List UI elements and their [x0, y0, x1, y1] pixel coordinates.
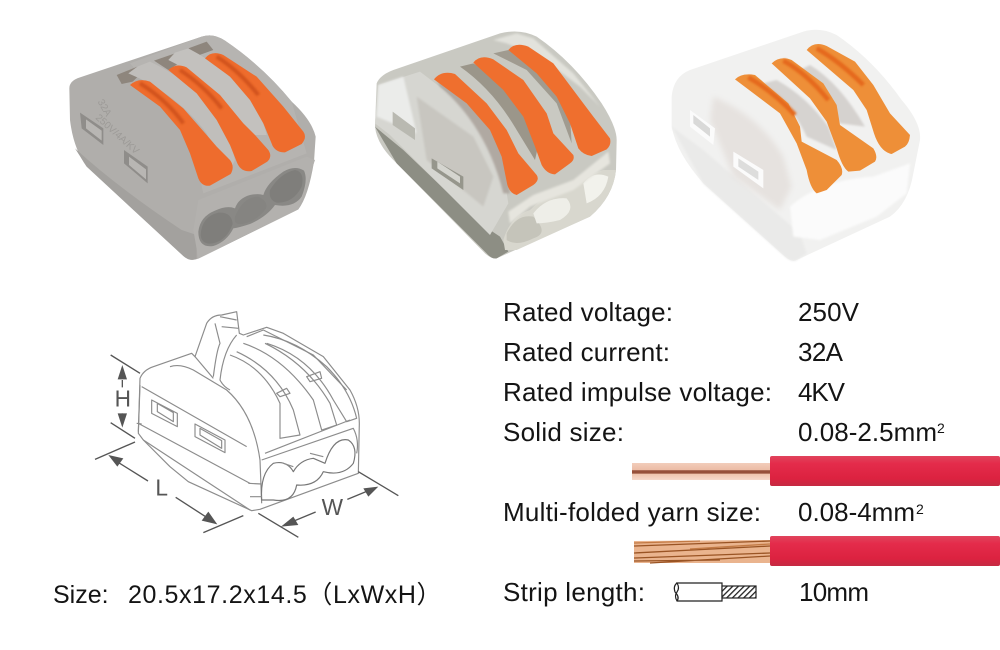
icon: wire strip length	[674, 583, 756, 601]
L dimension	[95, 442, 243, 533]
connector photo: clear with orange levers	[672, 30, 920, 261]
connector photo: grey with orange levers	[69, 35, 316, 260]
spec: solid size: Solid size:	[503, 417, 624, 447]
solid wire illustration	[632, 456, 1000, 486]
spec: strip length: Strip length:	[503, 577, 645, 607]
spec table	[503, 297, 945, 607]
lever 1	[130, 80, 233, 186]
lever 1	[735, 74, 842, 193]
moulded rating text: 32A	[95, 98, 113, 119]
lever 3	[807, 44, 910, 154]
side slots	[80, 113, 103, 145]
lever 3	[205, 53, 305, 152]
lever 1	[434, 73, 538, 195]
spec: solid size: 2	[937, 420, 945, 436]
connector photo: dark transparent with orange levers	[375, 31, 617, 258]
size caption: Size:	[53, 581, 109, 609]
spec: rated impulse voltage: Rated impulse voltage:	[503, 377, 772, 407]
wire entry holes	[503, 170, 616, 250]
lever 2	[168, 66, 270, 171]
connector photo: grey with orange levers: 250V/4A/KV	[93, 112, 141, 157]
W dimension: W	[322, 494, 344, 520]
spec: rated impulse voltage: 4KV	[798, 377, 846, 407]
spec: multi-folded yarn size: Multi-folded yarn size:	[503, 497, 761, 527]
spec: rated voltage: Rated voltage:	[503, 297, 673, 327]
spec: solid size	[503, 417, 945, 447]
size caption: 20.5x17.2x14.5（LxWxH）	[128, 581, 442, 609]
spec: rated current: Rated current:	[503, 337, 670, 367]
lever 3	[508, 45, 610, 156]
W dimension	[258, 472, 398, 537]
lever 2	[772, 58, 876, 172]
spec: rated voltage: 250V	[798, 297, 860, 327]
H dimension	[111, 355, 140, 438]
spec: solid size: 0.08-2.5mm	[798, 417, 937, 447]
spec: multi-folded yarn size	[503, 497, 924, 527]
spec: multi-folded yarn size: 0.08-4mm	[798, 497, 915, 527]
connector outline	[137, 312, 359, 511]
stranded wire illustration	[634, 536, 1000, 566]
spec: multi-folded yarn size: 2	[916, 501, 924, 517]
spec: rated voltage	[503, 297, 860, 327]
spec: rated current	[503, 337, 844, 367]
spec: rated current: 32A	[798, 337, 844, 367]
lever 2	[473, 57, 574, 174]
L dimension: L	[155, 474, 168, 500]
spec: strip length	[503, 577, 869, 607]
spec: strip length: 10mm	[799, 577, 869, 607]
H dimension: H	[115, 386, 131, 412]
technical line drawing with dimensions	[95, 312, 398, 537]
side slots	[393, 112, 415, 140]
side slots	[690, 110, 715, 145]
wire entry holes	[198, 168, 306, 246]
